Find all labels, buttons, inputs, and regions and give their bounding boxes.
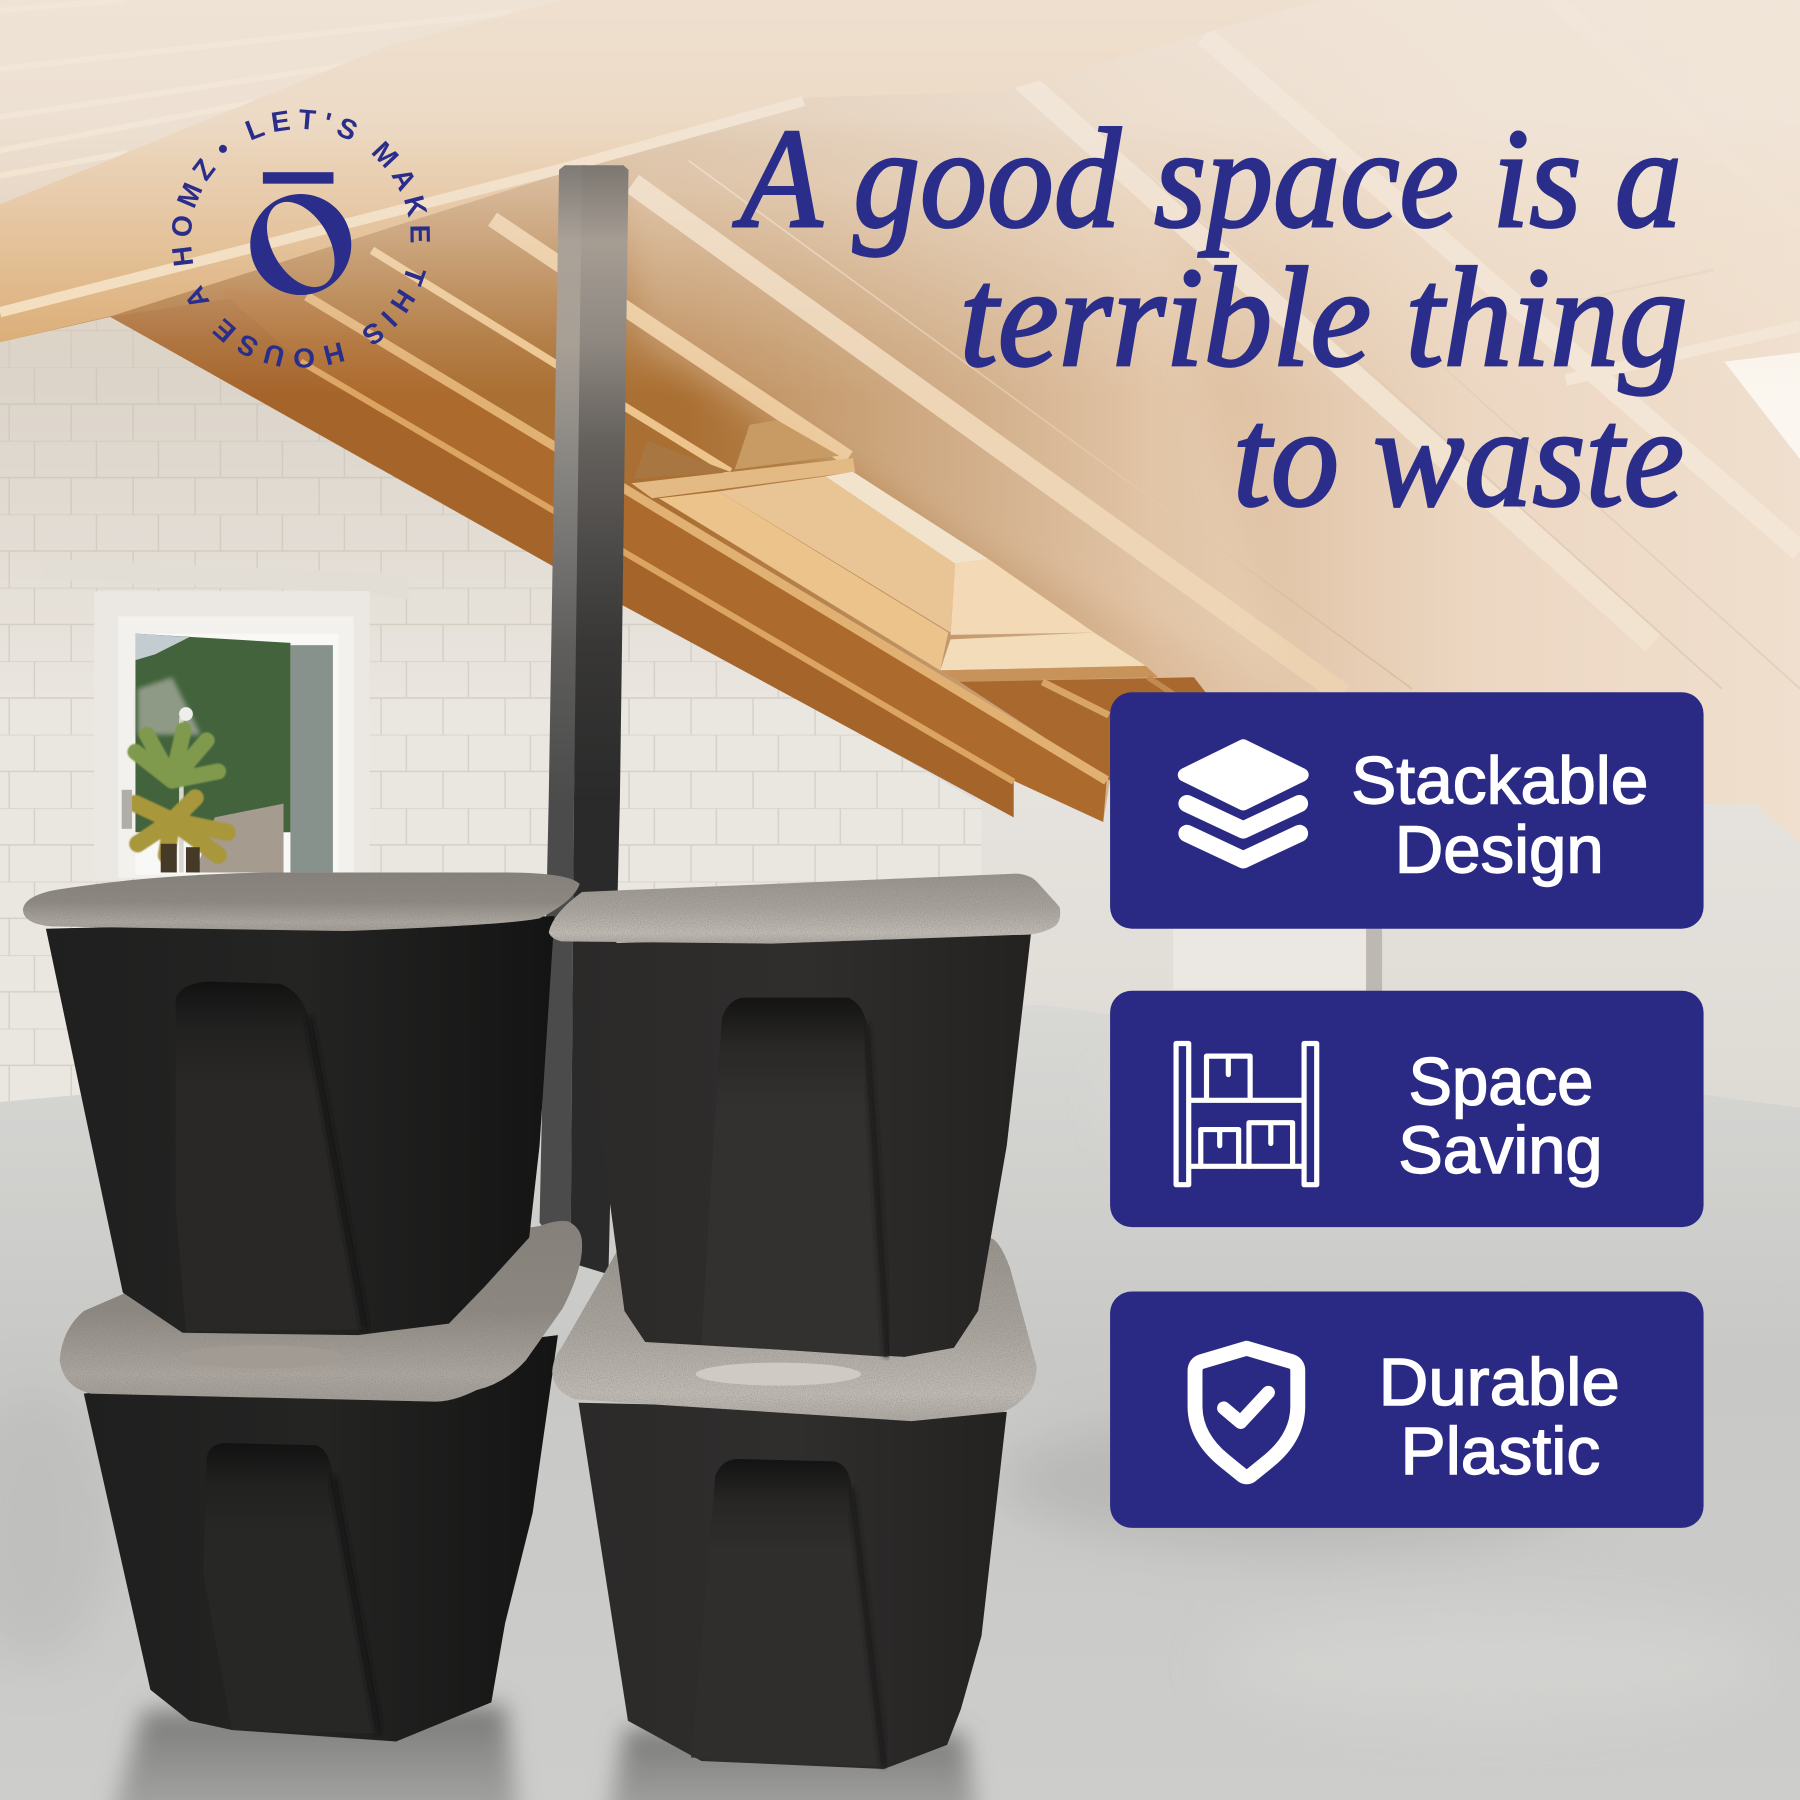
badge label	[1398, 1045, 1603, 1188]
badge label: Stackable	[1351, 745, 1648, 819]
ceiling window glare	[1724, 352, 1800, 459]
headline: terrible thing	[960, 238, 1687, 396]
upper-left purlins	[0, 0, 562, 204]
vertical pole	[540, 165, 629, 1274]
storage bin: top left	[23, 872, 580, 1335]
floor mottling	[0, 1056, 1768, 1722]
lid thumb recess	[179, 1345, 344, 1368]
back walls	[976, 781, 1800, 1108]
badge label: Plastic	[1401, 1415, 1600, 1489]
left brick wall	[0, 310, 982, 1102]
bin body	[579, 1403, 1007, 1769]
logo bar	[263, 172, 333, 184]
light wash over ceiling	[0, 0, 1800, 396]
handle recess	[203, 1443, 379, 1733]
badge label	[1379, 1346, 1620, 1489]
handle recess	[691, 1459, 884, 1767]
ceiling rafters	[372, 0, 1800, 695]
lid thumb recess	[696, 1363, 861, 1386]
badge panel	[1110, 991, 1704, 1227]
icon: shield with check	[1195, 1348, 1298, 1477]
window surround	[42, 559, 409, 878]
badge: durable plastic	[1110, 1291, 1704, 1528]
soft haze over rafters	[620, 161, 1286, 689]
headline: to waste	[1233, 378, 1684, 536]
badge label: Design	[1395, 813, 1604, 887]
storage bin: bottom left	[60, 1221, 582, 1741]
icon: shelf with boxes	[1176, 1043, 1317, 1185]
bin body	[46, 916, 554, 1335]
headline: A good space is a	[733, 99, 1682, 257]
storage bin: bottom right	[552, 1238, 1037, 1769]
badge label: Saving	[1398, 1114, 1603, 1188]
bin body	[84, 1335, 558, 1741]
badge panel	[1110, 1291, 1704, 1528]
lid	[549, 874, 1060, 944]
lid	[552, 1238, 1037, 1421]
skylight	[631, 420, 1158, 682]
ceiling	[0, 0, 1800, 844]
eave beams	[110, 287, 1107, 822]
storage bin: top right	[549, 874, 1060, 1357]
badge label: Space	[1409, 1045, 1593, 1119]
bin body	[575, 934, 1031, 1357]
floor	[0, 1004, 1800, 1800]
handle recess	[176, 982, 365, 1332]
handle recess	[701, 998, 887, 1357]
lid	[60, 1221, 582, 1402]
badge: space saving	[1110, 991, 1704, 1227]
headline	[733, 99, 1688, 536]
logo: circular brand mark	[172, 109, 430, 368]
icon: stacked layers	[1185, 746, 1302, 860]
circular slogan: • LET'S MAKE THIS HOUSE A HOMZ	[172, 109, 430, 368]
lid	[23, 872, 580, 931]
under-skylight rafters	[960, 677, 1274, 781]
logo letter O	[250, 194, 351, 295]
ridge beam	[0, 0, 1320, 342]
badge label	[1351, 745, 1648, 887]
floor shadows under bins	[103, 1705, 982, 1800]
badge label: Durable	[1379, 1346, 1620, 1420]
badge panel	[1110, 692, 1704, 929]
badge: stackable design	[1110, 692, 1704, 929]
